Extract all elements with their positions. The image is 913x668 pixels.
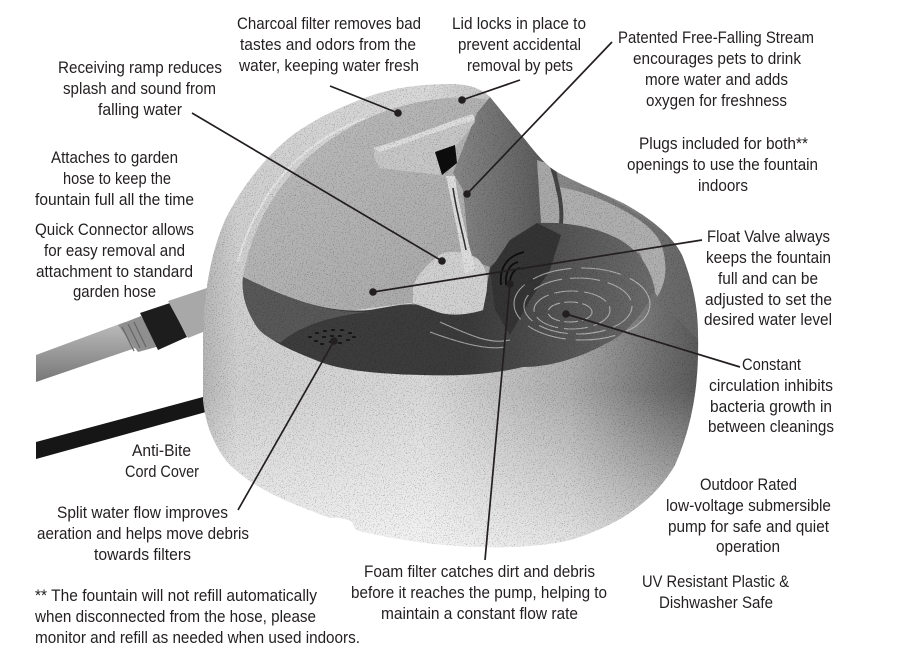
icon: garden hose — [36, 288, 208, 382]
text: constant circulation: circulation inhibits — [709, 376, 833, 395]
text: constant circulation — [708, 355, 834, 436]
spout opening — [435, 145, 457, 175]
receiving ramp dome — [413, 252, 487, 315]
text: receiving ramp: falling water — [98, 100, 182, 119]
text: attaches to garden hose — [35, 148, 194, 209]
text: float valve — [704, 227, 832, 329]
text: receiving ramp: Receiving ramp reduces — [58, 58, 222, 77]
text: constant circulation: bacteria growth in — [710, 397, 832, 416]
leader: lid locks — [458, 80, 520, 104]
drain holes — [308, 329, 356, 345]
leader: foam filter — [485, 280, 514, 560]
text: lid locks: Lid locks in place to — [452, 14, 586, 33]
water basin — [243, 223, 655, 375]
text: outdoor rated: operation — [716, 537, 780, 556]
text: quick connector: attachment to standard — [36, 262, 193, 281]
text: outdoor rated: low-voltage submersible — [666, 496, 831, 515]
text: plugs included — [627, 134, 818, 195]
text: foam filter — [351, 562, 607, 623]
text: free-falling stream: encourages pets to drink — [633, 49, 801, 68]
text: outdoor rated: pump for safe and quiet — [668, 517, 829, 536]
text: anti-bite cord cover — [125, 441, 199, 481]
rim highlight — [238, 118, 365, 262]
text: float valve: keeps the fountain — [706, 248, 831, 267]
leader: float valve — [369, 240, 702, 296]
leader lines and dots — [192, 42, 740, 560]
text: split water flow: aeration and helps move debris — [37, 524, 249, 543]
text: quick connector — [35, 220, 194, 301]
text: foam filter: before it reaches the pump, helping to — [351, 583, 607, 602]
lower body shading — [200, 80, 710, 555]
text: charcoal filter — [237, 14, 421, 75]
left pool shadow — [243, 277, 370, 343]
text: receiving ramp: splash and sound from — [63, 79, 216, 98]
text: constant circulation: Constant — [742, 355, 801, 374]
spout lid — [373, 115, 475, 175]
leader: charcoal filter — [330, 86, 402, 117]
text: free-falling stream: more water and adds — [645, 70, 788, 89]
ripples — [430, 268, 650, 348]
text: plugs included: Plugs included for both** — [639, 134, 808, 153]
back wall — [243, 97, 500, 315]
text: float valve: adjusted to set the — [705, 290, 832, 309]
right rim shade — [557, 172, 698, 340]
text: attaches to garden hose: hose to keep the — [63, 169, 171, 188]
leader: constant circulation — [562, 310, 740, 367]
text: UV resistant — [642, 572, 790, 612]
text: attaches to garden hose: fountain full all the time — [35, 190, 194, 209]
text: UV resistant: Dishwasher Safe — [659, 593, 773, 612]
text: quick connector: Quick Connector allows — [35, 220, 194, 239]
footnote: ** The fountain will not refill automatically — [35, 586, 317, 605]
text: anti-bite cord cover: Cord Cover — [125, 462, 199, 481]
text: UV resistant: UV Resistant Plastic & — [642, 572, 790, 591]
text: constant circulation: between cleanings — [708, 417, 834, 436]
text: attaches to garden hose: Attaches to garden — [51, 148, 178, 167]
text: charcoal filter: water, keeping water fresh — [238, 56, 419, 75]
fountain body — [203, 84, 698, 547]
illustration: fountain — [200, 80, 710, 555]
footnote — [34, 586, 360, 647]
text: split water flow — [37, 503, 249, 564]
light inner wall — [552, 187, 665, 297]
text: receiving ramp — [58, 58, 222, 119]
text: quick connector: garden hose — [73, 282, 156, 301]
text: anti-bite cord cover: Anti-Bite — [132, 441, 191, 460]
text: charcoal filter: tastes and odors from the — [240, 35, 416, 54]
text: plugs included: indoors — [698, 176, 748, 195]
text: lid locks: removal by pets — [467, 56, 573, 75]
text: free-falling stream — [618, 28, 814, 110]
leader: free-falling stream — [463, 42, 612, 198]
text: float valve: desired water level — [704, 310, 832, 329]
text: foam filter: maintain a constant flow rate — [381, 604, 578, 623]
pump housing — [490, 223, 561, 335]
text: lid locks: prevent accidental — [458, 35, 581, 54]
text: free-falling stream: Patented Free-Falling Stream — [618, 28, 814, 47]
text: free-falling stream: oxygen for freshness — [646, 91, 787, 110]
text: outdoor rated — [666, 475, 831, 556]
footnote: monitor and refill as needed when used indoors. — [35, 628, 360, 647]
speckle texture — [200, 80, 705, 555]
icon: anti-bite cord cover — [36, 397, 206, 459]
text: plugs included: openings to use the fountain — [627, 155, 818, 174]
text: foam filter: Foam filter catches dirt and debris — [364, 562, 595, 581]
leader: split water flow — [238, 337, 338, 510]
text: split water flow: towards filters — [94, 545, 191, 564]
leader: receiving ramp — [192, 113, 446, 265]
water stream — [446, 176, 475, 275]
text: outdoor rated: Outdoor Rated — [700, 475, 797, 494]
text: charcoal filter: Charcoal filter removes bad — [237, 14, 421, 33]
footnote: when disconnected from the hose, please — [34, 607, 316, 626]
dark wall behind spout — [453, 97, 562, 267]
vent arcs — [501, 252, 524, 286]
text: quick connector: for easy removal and — [44, 241, 185, 260]
text: float valve: Float Valve always — [707, 227, 830, 246]
text: lid locks — [452, 14, 586, 75]
text: split water flow: Split water flow improves — [57, 503, 228, 522]
text: float valve: full and can be — [718, 269, 818, 288]
